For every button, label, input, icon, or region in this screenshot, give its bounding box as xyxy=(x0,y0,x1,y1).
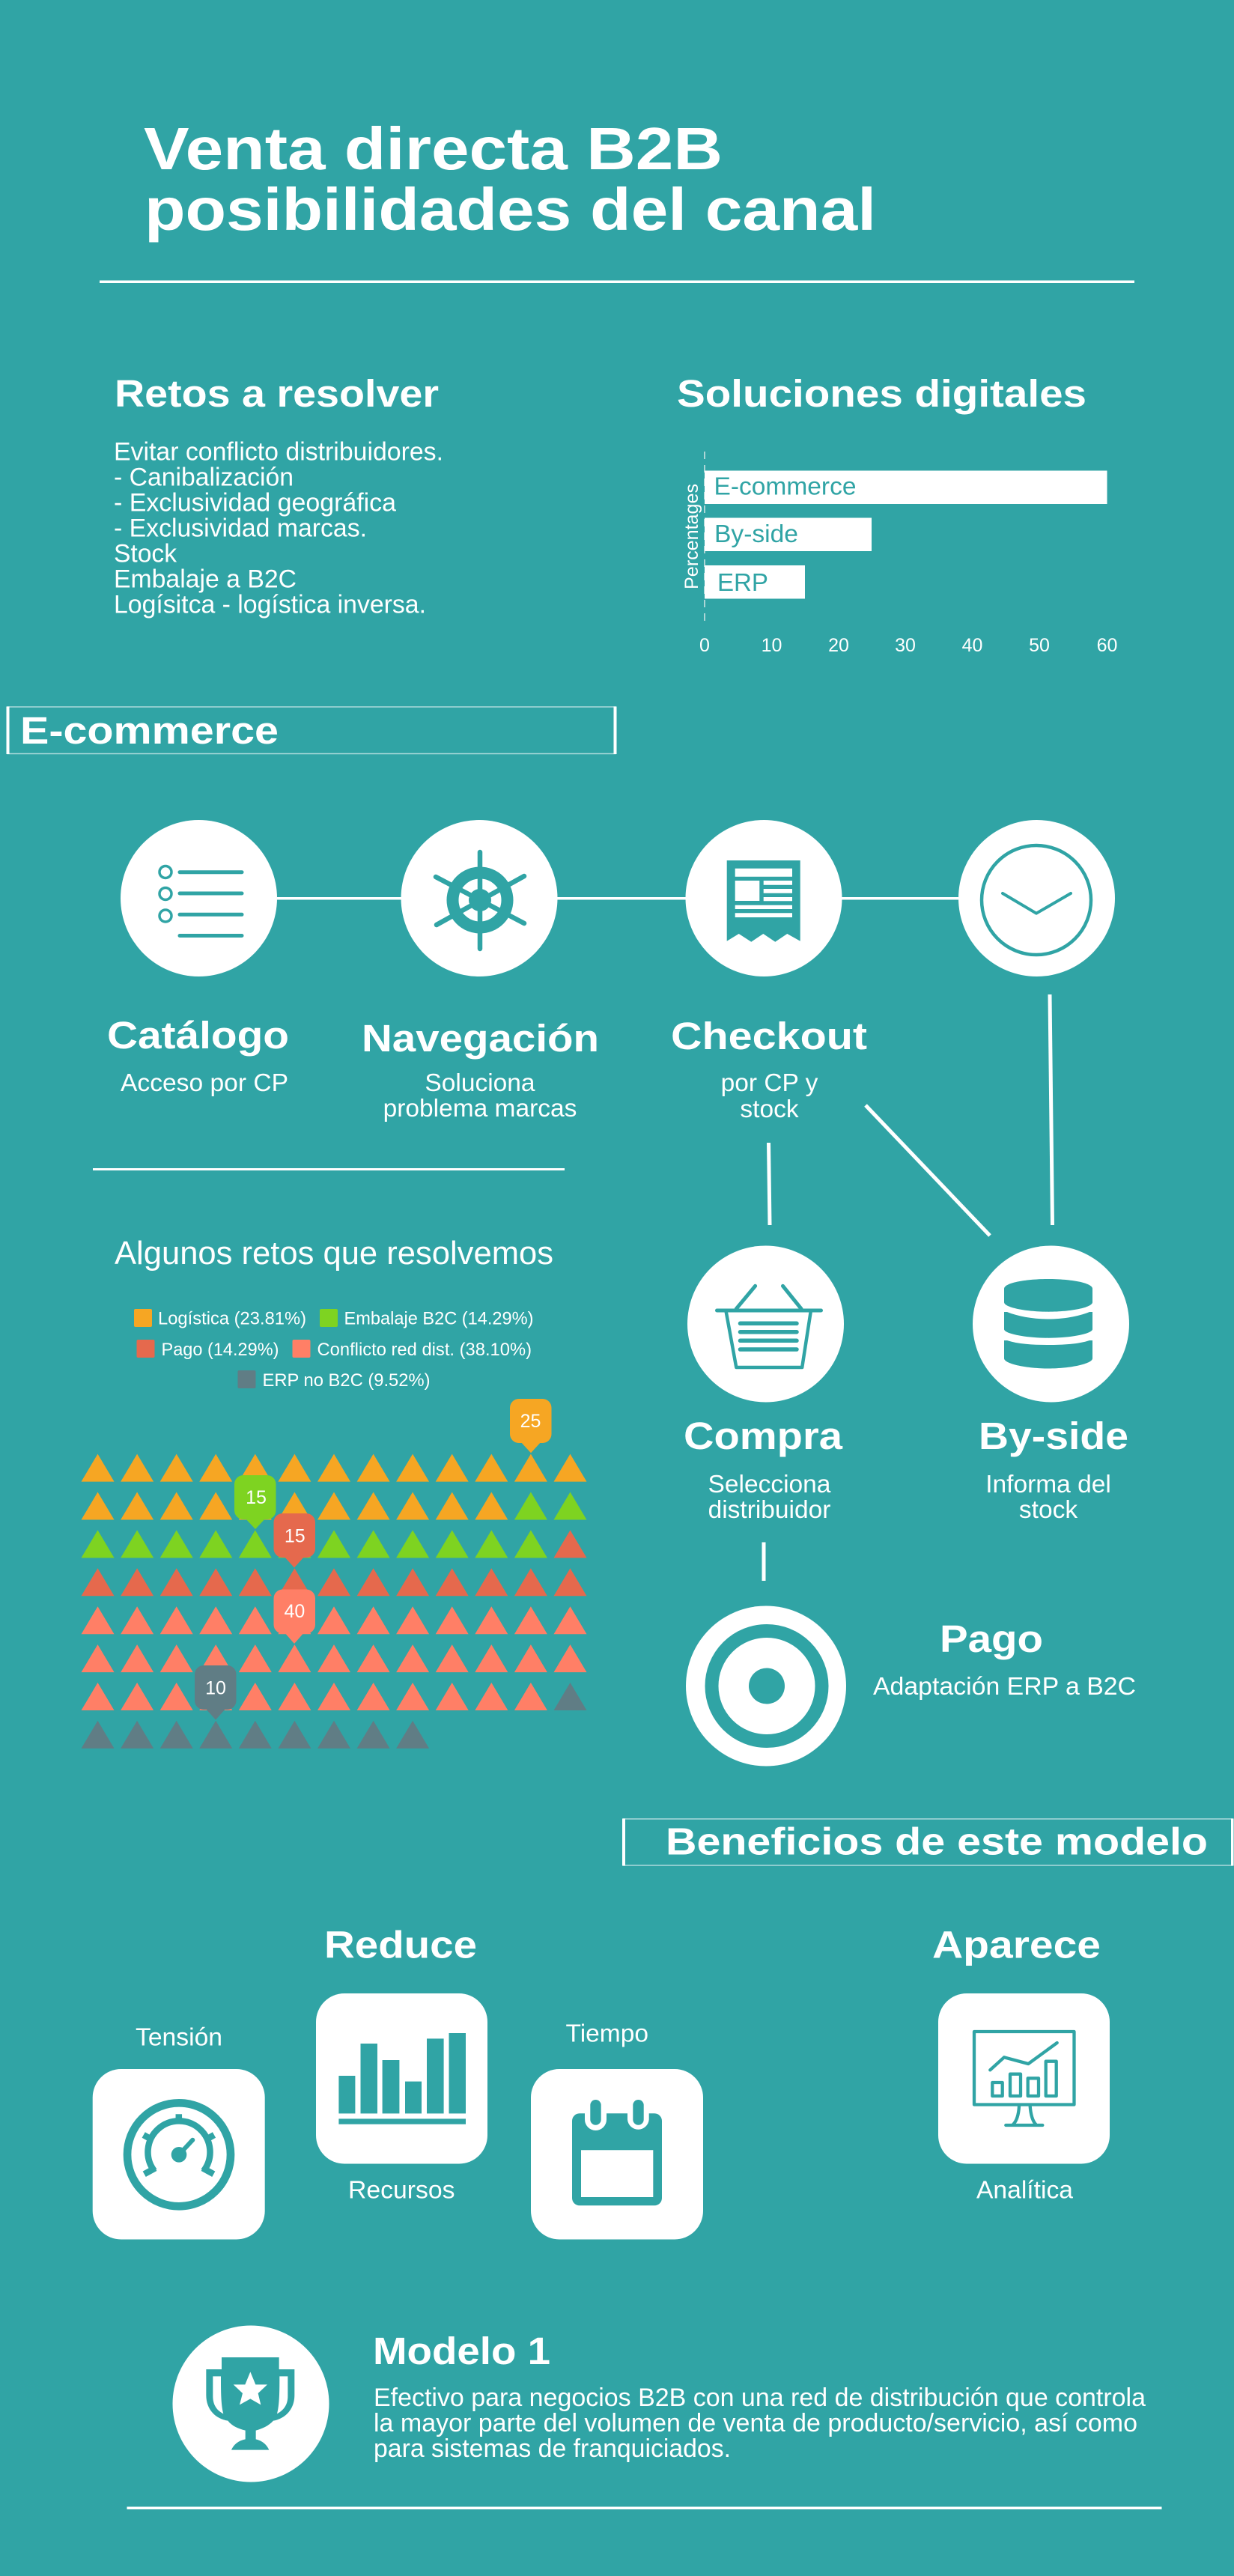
text block: retos list: - Exclusividad geográfica xyxy=(114,488,396,517)
callout: 40 xyxy=(274,1589,315,1644)
text block: retos list: - Canibalización xyxy=(114,463,294,491)
step: checkout: Checkout xyxy=(671,1015,867,1057)
card: analitica: Analítica xyxy=(976,2176,1073,2205)
bar: by-side: By-side xyxy=(714,520,798,548)
step: navegacion: problema marcas xyxy=(383,1095,577,1123)
icon: analytics monitor xyxy=(974,2032,1074,2125)
icon: receipt xyxy=(727,860,800,942)
step: by-side: Informa del xyxy=(985,1471,1111,1498)
step: by-side xyxy=(973,1246,1129,1524)
callout: 10 xyxy=(195,1665,237,1720)
text block: retos list: Evitar conflicto distribuidores. xyxy=(114,437,443,466)
axis ticks: 10 xyxy=(762,635,782,656)
bar: e-commerce: E-commerce xyxy=(714,473,857,500)
pictogram chart: triangles xyxy=(81,1454,587,1749)
step: checkout: por CP y xyxy=(721,1069,818,1097)
card: tiempo: Tiempo xyxy=(566,2020,648,2047)
step: pago: Pago xyxy=(940,1617,1043,1660)
panel: algunos retos xyxy=(81,1236,587,1749)
callout: 25 xyxy=(510,1399,551,1453)
title xyxy=(144,115,876,243)
axis ticks: 0 xyxy=(699,635,710,656)
axis ticks xyxy=(699,635,1117,656)
title: Venta directa B2B xyxy=(144,115,723,182)
legend: ERP no B2C (9.52%) xyxy=(262,1370,430,1391)
step: compra: distribuidor xyxy=(708,1496,830,1524)
step: navegacion: Soluciona xyxy=(425,1069,535,1097)
step: checkout: stock xyxy=(740,1096,799,1123)
step: catalogo: Acceso por CP xyxy=(121,1069,288,1097)
bar: e-commerce xyxy=(705,470,1107,504)
legend xyxy=(134,1309,533,1391)
text block: modelo 1 description: para sistemas de franquiciados. xyxy=(374,2434,731,2463)
step: compra xyxy=(684,1246,844,1524)
text block: retos list: Logísitca - logística inversa. xyxy=(114,590,426,619)
panel: modelo 1 xyxy=(172,2326,1146,2482)
callout: 10: 10 xyxy=(205,1677,226,1698)
card: recursos xyxy=(316,1993,487,2205)
icon: calendar xyxy=(572,2100,662,2205)
axis ticks: 40 xyxy=(962,635,982,656)
panel: soluciones digitales xyxy=(677,372,1117,656)
axis ticks: 50 xyxy=(1029,635,1050,656)
arrow: checkout to by-side xyxy=(866,1105,990,1236)
heading: retos a resolver: Retos a resolver xyxy=(115,372,439,415)
step: by-side: stock xyxy=(1019,1496,1078,1524)
icon: database xyxy=(1004,1279,1092,1369)
step: navegacion xyxy=(362,820,599,1123)
text block: modelo 1 description xyxy=(374,2384,1146,2463)
card: tension: Tensión xyxy=(136,2023,222,2052)
card: tension xyxy=(93,2023,265,2239)
callout: 15 green: 15 xyxy=(246,1487,267,1508)
text block: retos list xyxy=(114,437,443,619)
callout: 15 green xyxy=(234,1475,276,1529)
step: catalogo: Catálogo xyxy=(107,1014,289,1057)
bar: erp: ERP xyxy=(717,569,768,597)
connector: top row xyxy=(277,897,958,900)
chart title: Algunos retos que resolvemos xyxy=(115,1236,553,1272)
icon: basket xyxy=(717,1286,821,1367)
title: posibilidades del canal xyxy=(145,176,876,243)
step: pago: Adaptación ERP a B2C xyxy=(873,1673,1136,1701)
text block: retos list: Embalaje a B2C xyxy=(114,565,297,593)
callout: 15 red: 15 xyxy=(285,1526,306,1547)
axis ticks: 60 xyxy=(1097,635,1117,656)
card: analitica xyxy=(938,1993,1110,2205)
axis ticks: 30 xyxy=(895,635,916,656)
heading: aparece: Aparece xyxy=(932,1923,1101,1966)
step: clock icon circle xyxy=(958,820,1115,976)
heading: beneficios de este modelo: Beneficios de este modelo xyxy=(666,1820,1208,1863)
icon: target xyxy=(711,1631,822,1741)
arrow: clock to by-side xyxy=(1050,994,1053,1225)
heading: e-commerce: E-commerce xyxy=(20,709,279,752)
bar: by-side xyxy=(705,518,872,551)
callout: 40: 40 xyxy=(284,1601,305,1622)
icon: trophy xyxy=(206,2357,294,2450)
callout: 25: 25 xyxy=(520,1411,541,1432)
step: compra: Selecciona xyxy=(708,1471,831,1498)
axis ticks: 20 xyxy=(828,635,849,656)
bar chart: soluciones xyxy=(681,452,1117,656)
step: checkout xyxy=(671,820,867,1123)
legend: Pago (14.29%) xyxy=(162,1340,279,1360)
axis label: percentages: Percentages xyxy=(681,484,702,589)
step: navegacion: Navegación xyxy=(362,1017,599,1060)
text block: modelo 1 description: la mayor parte del volumen de venta de producto/servicio, así como xyxy=(374,2409,1137,2437)
step: pago xyxy=(686,1606,1136,1766)
legend: Embalaje B2C (14.29%) xyxy=(344,1309,533,1328)
heading: soluciones digitales: Soluciones digitales xyxy=(677,372,1086,415)
icon: chevron ring xyxy=(982,845,1091,955)
step: by-side: By-side xyxy=(979,1415,1128,1457)
panel: retos a resolver xyxy=(114,372,443,619)
icon: list xyxy=(159,866,242,936)
card: tiempo xyxy=(531,2020,703,2239)
legend: Logística (23.81%) xyxy=(158,1309,306,1328)
text block: retos list: - Exclusividad marcas. xyxy=(114,514,367,542)
card: recursos: Recursos xyxy=(348,2176,455,2205)
legend: Conflicto red dist. (38.10%) xyxy=(317,1340,532,1360)
heading: modelo 1: Modelo 1 xyxy=(373,2330,550,2372)
callout: 15 red xyxy=(274,1513,315,1568)
heading: reduce: Reduce xyxy=(324,1923,477,1966)
icon: gauge xyxy=(127,2103,231,2206)
step: compra: Compra xyxy=(684,1415,843,1457)
text block: modelo 1 description: Efectivo para negocios B2B con una red de distribución que controla xyxy=(374,2384,1146,2412)
step: catalogo xyxy=(107,820,289,1097)
icon: ship wheel xyxy=(436,852,524,949)
bar: erp xyxy=(705,565,805,599)
text block: retos list: Stock xyxy=(114,539,177,568)
arrow: checkout to compra xyxy=(768,1143,770,1225)
arrow: compra to pago xyxy=(762,1543,765,1581)
icon: bars xyxy=(338,2033,466,2124)
heading: e-commerce xyxy=(6,707,617,754)
